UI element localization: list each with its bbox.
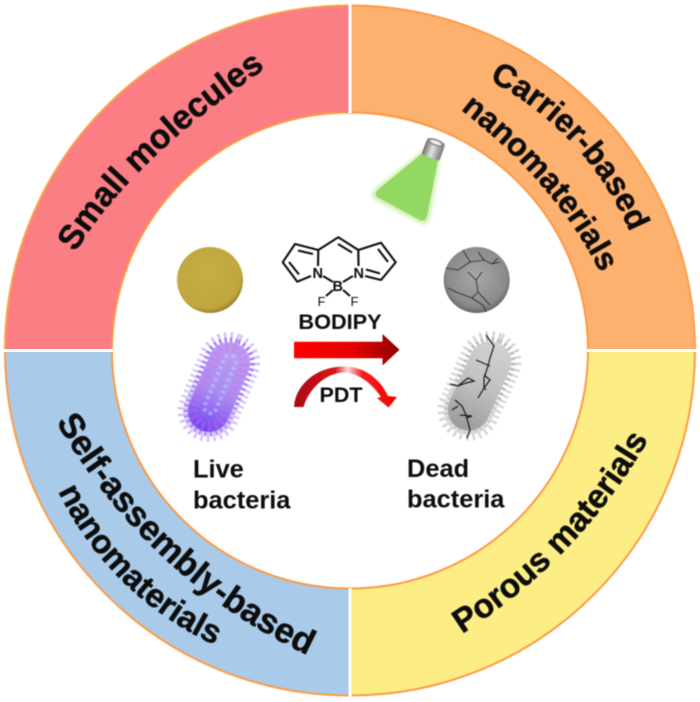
label: dead bacteria: Dead [407,455,469,483]
icon: dead coccus with cracks [444,247,510,313]
arrow: curved PDT arrow [294,366,397,408]
icon: dead bacterium [437,331,522,441]
icon: live coccus [177,247,243,313]
label: PDT: PDT [320,383,362,407]
BODIPY atom labels: B [333,279,343,295]
label: dead bacteria [407,455,505,514]
arrow: red reaction arrow [294,334,400,366]
BODIPY atom labels: N [354,266,364,282]
label: live bacteria: Live [193,456,244,484]
label: live bacteria [193,456,291,514]
label: live bacteria: bacteria [193,486,291,514]
BODIPY atom labels [312,266,364,309]
icon: BODIPY structure [283,237,396,296]
panel: porous materials sector [352,352,694,696]
panel: carrier-based nanomaterials sector [352,6,694,349]
heading: carrier-based nanomaterials: Carrier-based [492,63,652,231]
heading: small molecules: Small molecules [58,56,264,250]
BODIPY atom labels: N [312,266,323,282]
heading: carrier-based nanomaterials: nanomaterials [462,96,614,271]
BODIPY atom labels: F [351,294,359,309]
heading: self-assembly-based nanomaterials: nanomaterials [58,484,220,644]
label: dead bacteria: bacteria [407,486,505,514]
icon: live bacterium [177,332,261,442]
label: BODIPY: BODIPY [298,309,382,334]
heading: porous materials: Porous materials [450,432,647,634]
BODIPY atom labels: F [318,294,326,309]
panel: small molecules sector [6,6,348,349]
panel: self-assembly-based nanomaterials sector [6,352,348,695]
icon: green lamp [374,136,446,222]
heading: self-assembly-based nanomaterials: Self-assembly-based [58,412,318,656]
